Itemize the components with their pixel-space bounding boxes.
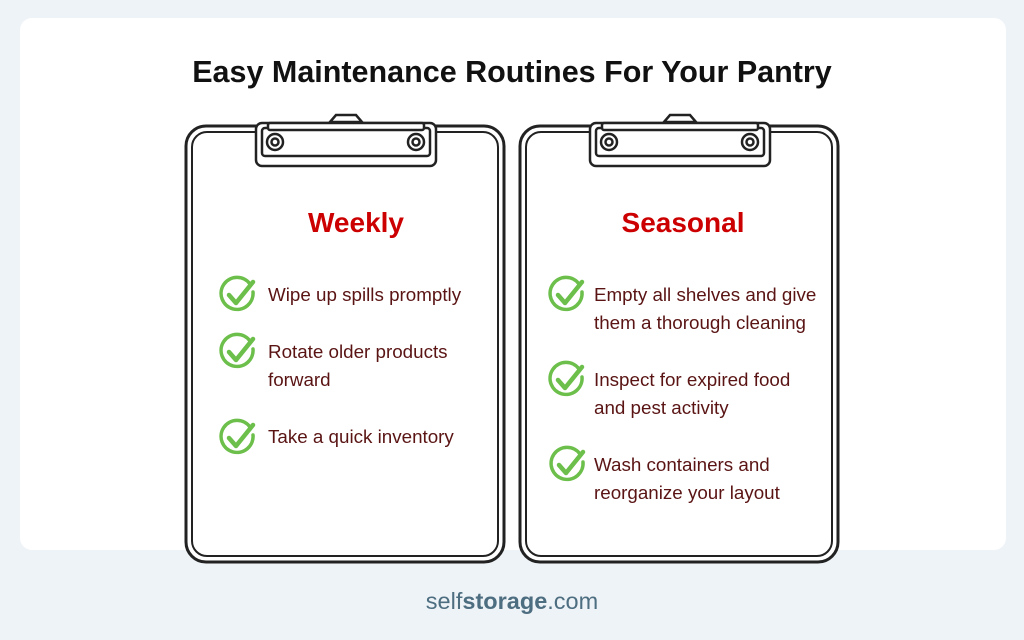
item: wash containers: reorganize your layout	[594, 482, 781, 503]
title: Easy Maintenance Routines For Your Pantry	[192, 55, 832, 89]
item: empty shelves	[550, 277, 816, 333]
item: inspect	[550, 362, 790, 418]
item: rotate products: forward	[268, 369, 331, 390]
item: wipe up spills: Wipe up spills promptly	[268, 284, 462, 305]
clipboard clip	[590, 115, 770, 166]
clipboard board	[520, 126, 838, 562]
clipboard clip	[256, 115, 436, 166]
item: wash containers	[551, 447, 781, 503]
item: rotate products	[221, 334, 448, 390]
heading: Weekly: Weekly	[308, 207, 404, 238]
item: empty shelves: Empty all shelves and give	[594, 284, 816, 305]
item: wash containers: Wash containers and	[594, 454, 770, 475]
item: empty shelves: them a thorough cleaning	[594, 312, 806, 333]
clipboard board	[186, 126, 504, 562]
panel: weekly clipboard	[186, 115, 504, 562]
item: wipe up spills	[221, 277, 462, 309]
item: inspect: and pest activity	[594, 397, 729, 418]
heading: Seasonal: Seasonal	[622, 207, 744, 238]
panel: seasonal clipboard	[520, 115, 838, 562]
item: inventory: Take a quick inventory	[268, 426, 454, 447]
footer logo: selfstorage.com	[426, 588, 598, 614]
item: inventory	[221, 420, 454, 452]
item: rotate products: Rotate older products	[268, 341, 448, 362]
item: inspect: Inspect for expired food	[594, 369, 790, 390]
